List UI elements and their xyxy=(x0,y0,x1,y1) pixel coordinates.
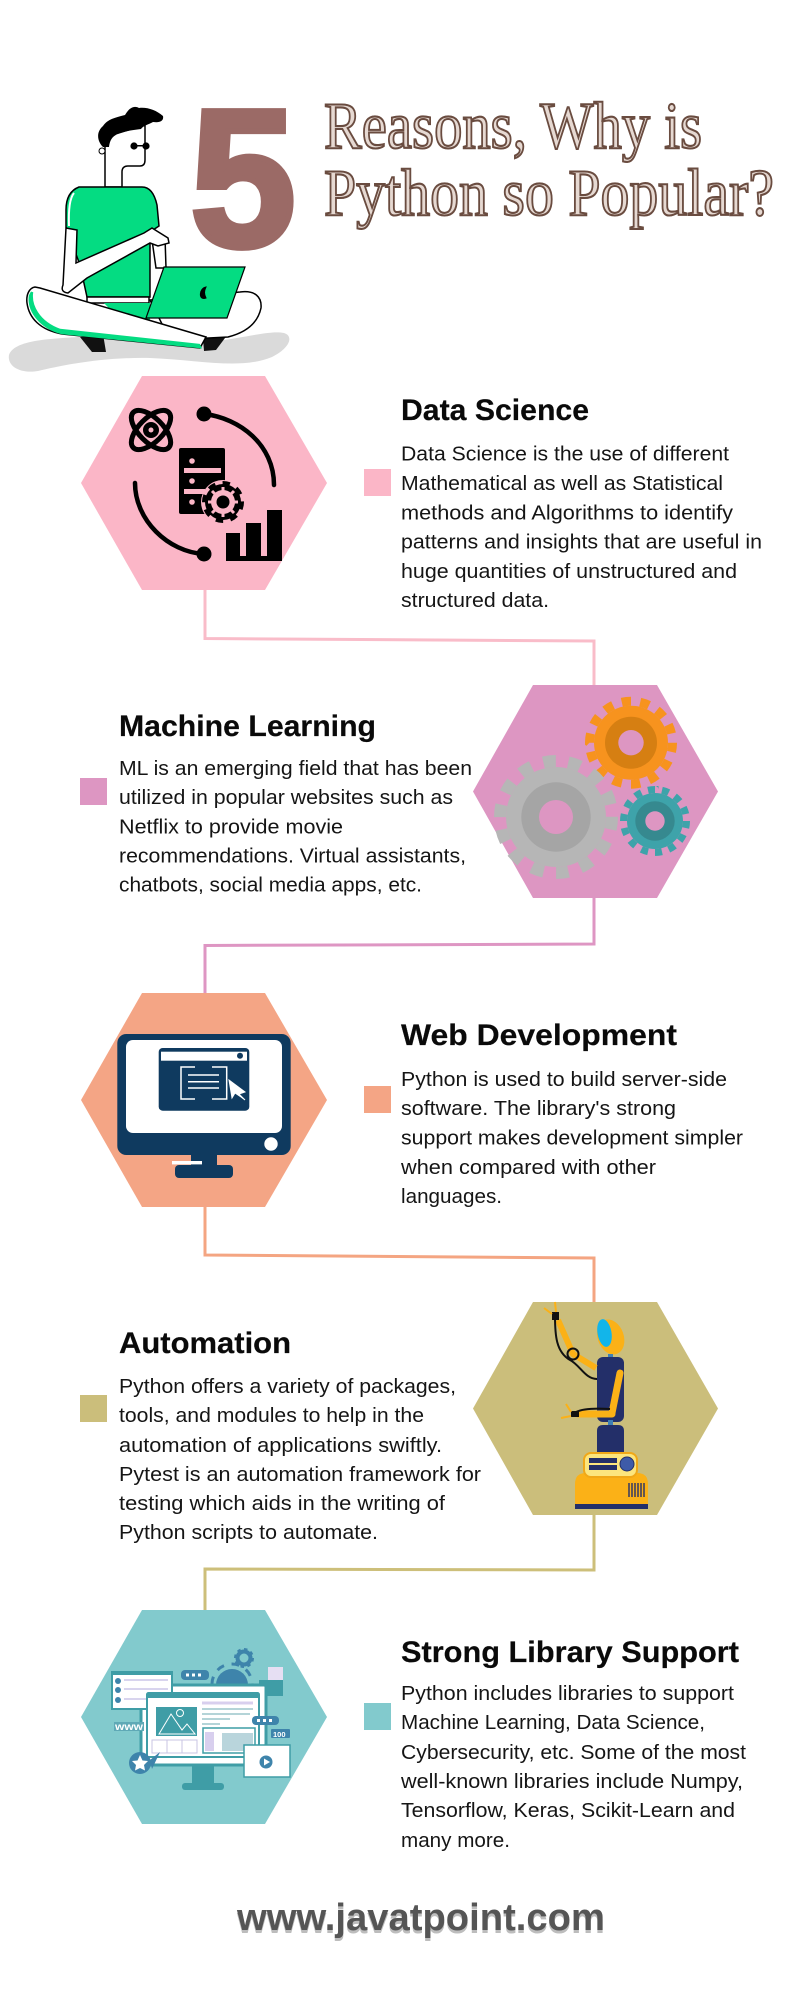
title: Reasons, Why is xyxy=(324,89,702,163)
heading: Machine Learning xyxy=(119,710,376,743)
body text: Netflix to provide movie xyxy=(119,816,343,838)
connector: web development to automation xyxy=(205,1207,594,1302)
icon: web library windows xyxy=(112,1649,290,1790)
icon: data science xyxy=(125,404,282,562)
icon: robot xyxy=(544,1302,648,1509)
body text: Python includes libraries to support xyxy=(401,1682,734,1705)
body text: when compared with other xyxy=(400,1156,656,1179)
body text: tools, and modules to help in the xyxy=(119,1404,424,1427)
body text: Machine Learning, Data Science, xyxy=(401,1711,705,1734)
panel: strong library support xyxy=(81,1610,746,1852)
title xyxy=(324,89,774,230)
connector: machine learning to web development xyxy=(205,898,594,993)
colour key square xyxy=(364,1086,391,1113)
body text: Mathematical as well as Statistical xyxy=(401,472,723,495)
illustration: man with laptop sitting cross-legged xyxy=(9,107,289,372)
body text: recommendations. Virtual assistants, xyxy=(119,844,466,868)
connector: data science to machine learning xyxy=(205,590,594,685)
body text: chatbots, social media apps, etc. xyxy=(119,874,422,896)
body text xyxy=(400,1068,743,1208)
body text: methods and Algorithms to identify xyxy=(401,502,734,524)
body text: ML is an emerging field that has been xyxy=(119,757,472,780)
panel: data science xyxy=(81,376,762,612)
panel: web development xyxy=(81,993,743,1208)
body text: Python offers a variety of packages, xyxy=(119,1375,456,1398)
body text: languages. xyxy=(401,1185,502,1208)
icon: web library windows: 100 xyxy=(273,1730,286,1739)
panel: automation xyxy=(80,1302,718,1544)
heading: Strong Library Support xyxy=(401,1636,739,1669)
footer url: www.javatpoint.com xyxy=(236,1900,605,1942)
colour key square xyxy=(364,1703,391,1730)
body text: testing which aids in the writing of xyxy=(119,1492,445,1515)
heading: Data Science xyxy=(401,394,589,427)
footer url: www.javatpoint.com xyxy=(236,1897,605,1939)
colour key square xyxy=(364,469,391,496)
body text: Python scripts to automate. xyxy=(119,1521,378,1544)
connector: automation to strong library support xyxy=(205,1515,594,1610)
body text: Pytest is an automation framework for xyxy=(119,1463,481,1486)
icon: web library windows: www xyxy=(114,1722,143,1733)
body text: many more. xyxy=(401,1829,510,1852)
body text: software. The library's strong xyxy=(401,1097,676,1120)
big number 5: 5 xyxy=(190,69,296,288)
colour key square xyxy=(80,1395,107,1422)
body text xyxy=(401,442,762,612)
body text: Tensorflow, Keras, Scikit-Learn and xyxy=(401,1799,735,1822)
colour key square xyxy=(80,778,107,805)
body text: support makes development simpler xyxy=(401,1126,743,1150)
body text: Cybersecurity, etc. Some of the most xyxy=(401,1741,746,1764)
body text: Python is used to build server-side xyxy=(401,1068,727,1091)
body text: structured data. xyxy=(401,589,549,612)
icon: three gears xyxy=(500,701,686,873)
body text xyxy=(400,1682,746,1852)
body text: Data Science is the use of different xyxy=(401,442,729,466)
heading: Web Development xyxy=(401,1019,677,1052)
icon: desktop monitor xyxy=(117,1034,291,1178)
body text xyxy=(119,757,472,896)
body text: automation of applications swiftly. xyxy=(119,1434,442,1457)
body text: patterns and insights that are useful in xyxy=(401,530,762,554)
body text: huge quantities of unstructured and xyxy=(401,560,737,583)
body text xyxy=(119,1375,481,1544)
panel: machine learning xyxy=(80,685,718,898)
body text: well-known libraries include Numpy, xyxy=(400,1770,743,1793)
body text: utilized in popular websites such as xyxy=(119,786,453,809)
heading: Automation xyxy=(119,1327,291,1360)
